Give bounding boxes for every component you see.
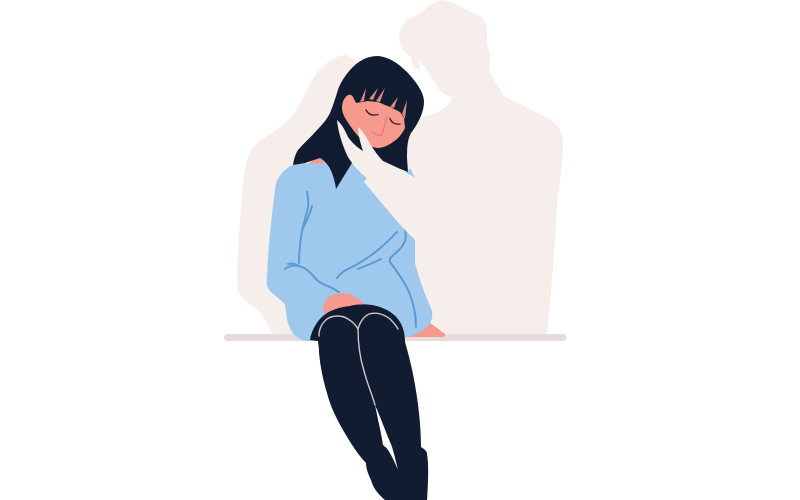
shadow: man's silhouette (399, 0, 563, 334)
fringe gaps (360, 88, 407, 119)
woman's right hand resting on shelf (406, 323, 445, 337)
hair (293, 56, 424, 189)
shelf (224, 334, 566, 341)
knee outlines (319, 313, 398, 405)
gap between the shins (375, 405, 398, 470)
face (342, 95, 405, 148)
woman's left hand on knee (323, 293, 367, 313)
closed eyes (366, 110, 400, 124)
shadow: woman's silhouette behind her (237, 55, 370, 334)
nose (372, 117, 387, 135)
neck (298, 156, 330, 170)
head (342, 88, 407, 148)
man's hand and arm over the woman (337, 120, 430, 250)
sweater (267, 160, 432, 341)
legs (310, 304, 428, 500)
sweater fold lines (285, 192, 416, 327)
